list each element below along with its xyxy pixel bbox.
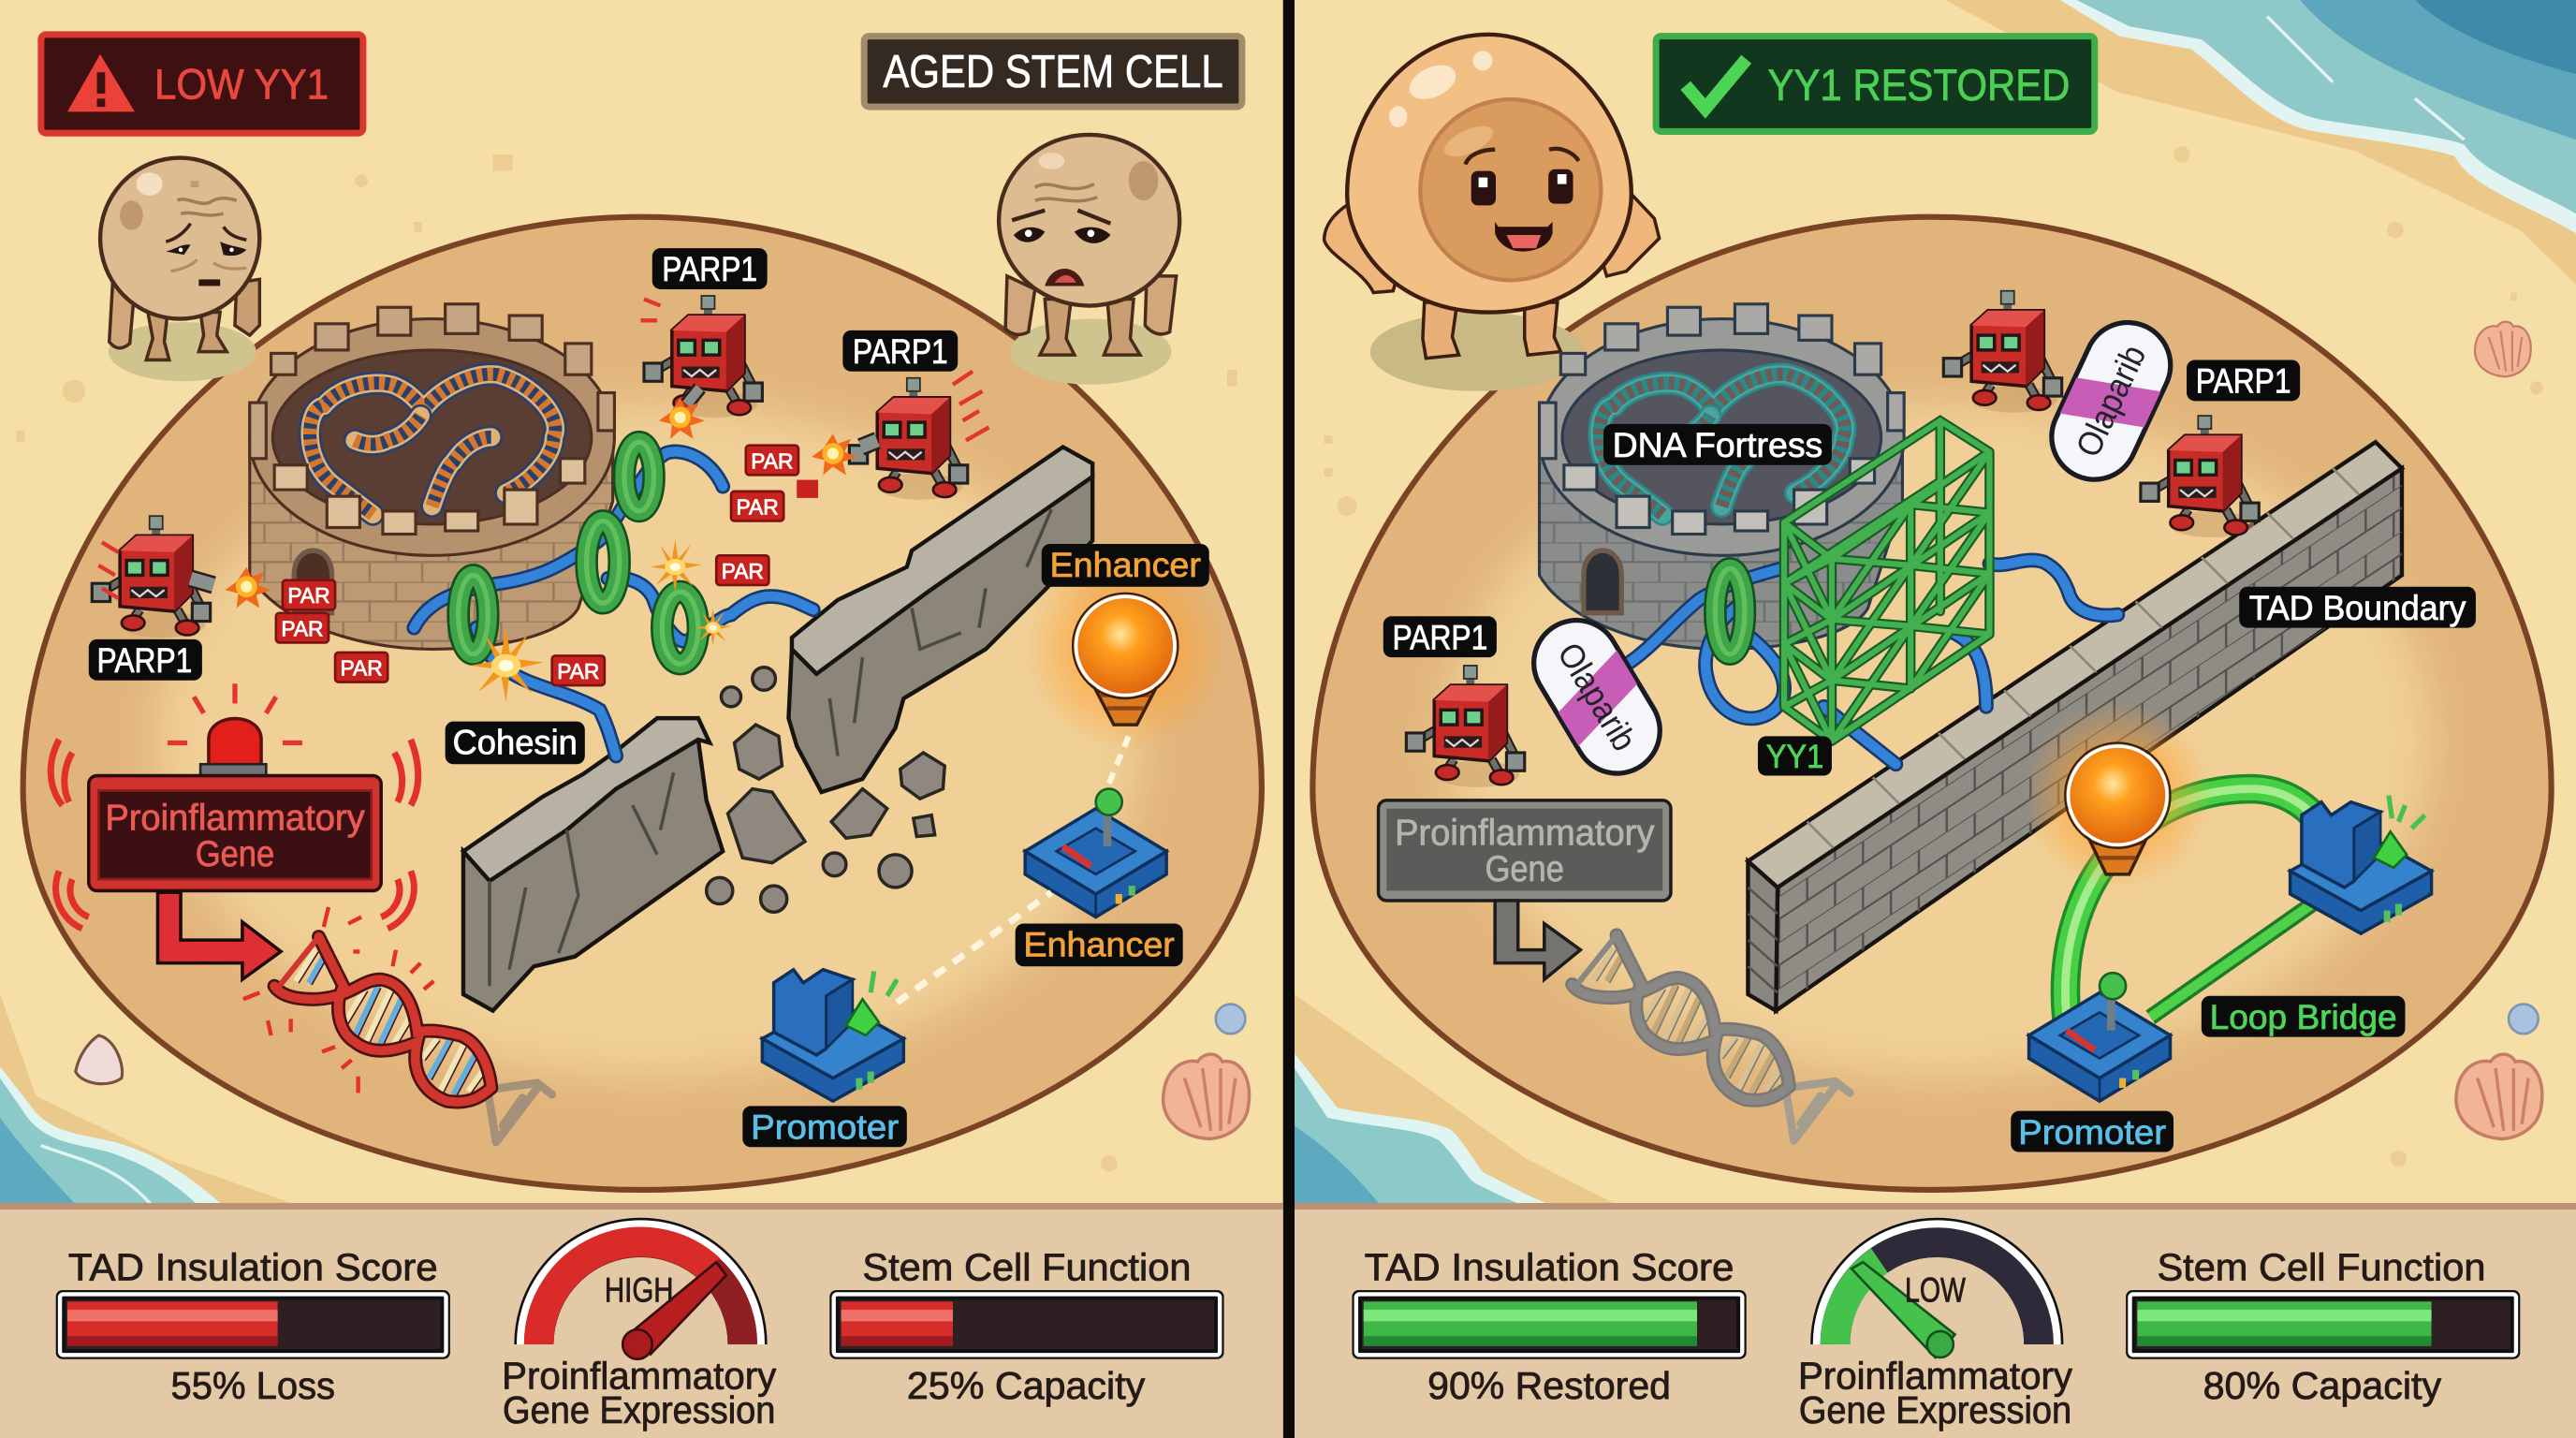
Olaparib pill left [1518, 605, 1676, 789]
enhancer bulb [2023, 700, 2213, 890]
rubble rocks [707, 668, 944, 912]
metric: TAD Insulation Score [1352, 1245, 1747, 1407]
gauge: proinflammatory gene expression HIGH: HIGH [605, 1270, 674, 1309]
badge: YY1 RESTORED [1656, 37, 2095, 131]
icon: check mark [1686, 59, 1747, 109]
PARP1 robot right [812, 372, 989, 500]
green chromatin loop bridge [2065, 789, 2333, 1019]
icon: warning triangle [67, 54, 135, 111]
PARP1 robot right [2141, 416, 2259, 537]
label: Promoter: Promoter [751, 1108, 899, 1147]
panel: right scene, YY1 restored [1295, 0, 2576, 1206]
metric: TAD Insulation Score [56, 1245, 450, 1407]
red arrow to gene [157, 892, 281, 979]
YY1 green scaffold [1784, 420, 1989, 741]
metric: Stem Cell Function: Stem Cell Function [2157, 1245, 2485, 1288]
blue chromatin strands [1625, 560, 2117, 764]
label: DNA Fortress: DNA Fortress [1613, 426, 1822, 464]
label: Enhancer bottom: Enhancer [1023, 926, 1175, 964]
silenced DNA helix, grey [1573, 935, 1850, 1140]
gauge: proinflammatory gene expression HIGH [502, 1238, 777, 1431]
enhancer joystick switch [1025, 789, 1166, 917]
proinflammatory gene sign, silenced: Proinflammatory [1395, 813, 1655, 853]
PAR tags: PAR [341, 655, 383, 680]
panel: right metrics [1295, 1203, 2576, 1438]
PAR tags: PAR [751, 448, 793, 473]
Olaparib pill top: Olaparib [2069, 339, 2153, 462]
Olaparib pill top [2038, 308, 2185, 493]
grey arrow [1495, 901, 1580, 979]
cell membrane [23, 217, 1262, 1190]
gauge: proinflammatory gene expression LOW: LOW [1905, 1270, 1966, 1309]
DNA fortress (grey, intact) [1540, 304, 1904, 649]
aged cell character right [999, 135, 1179, 385]
brick TAD boundary wall [1748, 442, 2402, 1011]
badge: LOW YY1: LOW YY1 [154, 60, 329, 108]
shells right scene [2456, 322, 2542, 1139]
enhancer bulb glowing [1023, 548, 1227, 751]
label: Loop Bridge: Loop Bridge [2210, 998, 2397, 1036]
panel: left scene, low YY1 aged stem cell [0, 0, 1283, 1206]
ocean at top-right [1945, 0, 2576, 285]
sand specks and pebbles [17, 154, 1237, 1172]
Olaparib pill left: Olaparib [1550, 636, 1644, 757]
panel: left metrics [0, 1203, 1283, 1438]
metric: Stem Cell Function [829, 1245, 1224, 1407]
metric: Stem Cell Function: 80% Capacity [2203, 1364, 2442, 1407]
label: TAD Boundary: TAD Boundary [2249, 589, 2466, 627]
shells left scene [76, 1005, 1249, 1139]
sand specks [1325, 146, 2543, 1167]
DNA fortress (tan, crumbling) [250, 304, 614, 649]
PARP1 robot left [1406, 666, 1525, 787]
badge: LOW YY1 [41, 35, 363, 133]
cohesin rings [459, 442, 698, 664]
promoter joystick switch [2029, 973, 2170, 1101]
PARP1 robot top [640, 270, 762, 439]
label: Cohesin: Cohesin [453, 724, 578, 762]
promoter machine [762, 970, 903, 1101]
metric: Stem Cell Function: 25% Capacity [907, 1364, 1146, 1407]
proinflammatory gene sign, silenced [1379, 800, 1671, 901]
label: PARP1 top: PARP1 [662, 250, 757, 288]
cohesin ring [1715, 568, 1745, 654]
wet sand and ocean at lower-left shore [0, 994, 296, 1205]
healthy cell character [1325, 35, 1660, 391]
PAR tags: PAR [722, 559, 764, 583]
dashed broken link [897, 892, 1051, 1003]
badge: AGED STEM CELL [864, 37, 1242, 107]
metric: TAD Insulation Score: TAD Insulation Score [1365, 1245, 1734, 1288]
label: Enhancer top: Enhancer [1050, 546, 1201, 584]
metric: TAD Insulation Score: TAD Insulation Score [68, 1245, 438, 1288]
PARP1 robot top [1943, 291, 2062, 413]
PAR tags: PAR [287, 583, 330, 608]
gauge: proinflammatory gene expression LOW: Gene Expression [1799, 1388, 2071, 1431]
gauge: proinflammatory gene expression LOW: Proinflammatory [1798, 1354, 2073, 1397]
label: PARP1 top right: PARP1 [2196, 362, 2291, 401]
cell membrane [1312, 217, 2552, 1190]
enhancer machine [2291, 796, 2432, 933]
gauge: proinflammatory gene expression HIGH: Gene Expression [503, 1388, 775, 1431]
cell interior light area [156, 403, 1142, 1077]
label: YY1: YY1 [1766, 739, 1823, 775]
sparks on chromatin [470, 539, 732, 702]
badge: AGED STEM CELL: AGED STEM CELL [883, 47, 1223, 97]
proinflammatory gene sign, silenced: Gene [1486, 849, 1564, 889]
broken TAD boundary wall, upper piece [788, 447, 1092, 792]
label: PARP1 right: PARP1 [853, 332, 948, 371]
metric: TAD Insulation Score: 55% Loss [171, 1364, 335, 1407]
label: PARP1 left: PARP1 [97, 641, 192, 680]
dotted link bulb to enhancer switch [1104, 736, 1129, 796]
cell interior light area [1445, 403, 2432, 1077]
label: Promoter: Promoter [2018, 1113, 2166, 1152]
PAR tags: PAR [737, 494, 779, 519]
metric: Stem Cell Function: Stem Cell Function [862, 1245, 1191, 1288]
gauge: proinflammatory gene expression LOW [1798, 1238, 2073, 1431]
PARP1 robot left [92, 516, 271, 638]
metric: Stem Cell Function [2126, 1245, 2520, 1407]
PAR tags [276, 446, 818, 685]
label: PARP1 left: PARP1 [1392, 618, 1487, 656]
central divider [1283, 0, 1295, 1438]
broken TAD boundary wall, lower piece [463, 718, 723, 1011]
gauge: proinflammatory gene expression HIGH: Proinflammatory [502, 1354, 777, 1397]
wet sand and ocean at lower-left shore [1295, 994, 1617, 1205]
PAR tags: PAR [281, 616, 324, 640]
metric: TAD Insulation Score: 90% Restored [1427, 1364, 1671, 1407]
badge: YY1 RESTORED: YY1 RESTORED [1767, 61, 2070, 110]
aged cell character left [100, 158, 259, 381]
proinflammatory gene sign with siren [51, 683, 418, 929]
proinflammatory gene sign with siren: Gene [196, 834, 274, 874]
expressed DNA helix, red [243, 907, 552, 1142]
PAR tags: PAR [557, 659, 599, 683]
blue chromatin strands [414, 451, 813, 756]
proinflammatory gene sign with siren: Proinflammatory [105, 798, 365, 838]
